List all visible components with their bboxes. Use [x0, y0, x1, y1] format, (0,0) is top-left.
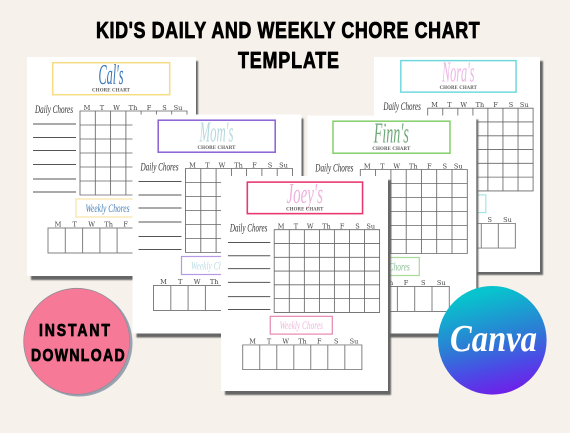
- daily grid: Su: [454, 162, 463, 170]
- daily grid: S: [268, 162, 273, 170]
- weekly chores label: [76, 199, 139, 217]
- title: [96, 18, 480, 74]
- chart sheet: Finn's: [307, 116, 478, 338]
- weekly row: W: [282, 337, 289, 345]
- badge: instant download: [24, 288, 132, 396]
- content: Nora's: [381, 58, 533, 248]
- daily grid: [428, 101, 533, 191]
- weekly chores label: Weekly Chores: [86, 201, 130, 215]
- daily grid: Th: [234, 162, 244, 170]
- daily grid: Th: [129, 104, 138, 112]
- header: Finn's: CHORE CHART: [372, 147, 411, 152]
- header: Cal's: CHORE CHART: [92, 88, 131, 94]
- weekly row: M: [403, 216, 410, 224]
- daily grid: T: [100, 104, 105, 112]
- weekly row: W: [88, 220, 95, 228]
- weekly chores label: [356, 258, 419, 276]
- header: Cal's: Cal's: [98, 59, 124, 91]
- weekly chores label: Weekly Chores: [191, 258, 235, 272]
- weekly row: S: [246, 278, 251, 286]
- title: TEMPLATE: [238, 48, 339, 74]
- weekly row: [396, 216, 515, 248]
- weekly row: Th: [385, 279, 394, 287]
- weekly row: W: [369, 279, 376, 287]
- weekly row: Th: [104, 220, 114, 228]
- weekly row: [328, 279, 449, 312]
- daily grid: M: [278, 223, 285, 231]
- daily grid: Su: [366, 223, 375, 231]
- weekly row: M: [335, 279, 342, 287]
- weekly row: Th: [298, 337, 307, 345]
- weekly row: M: [55, 220, 62, 228]
- daily grid: W: [393, 162, 400, 170]
- chart sheet: Joey's: [221, 176, 391, 395]
- chart sheet: Nora's: [374, 57, 543, 275]
- header: Cal's: [53, 59, 170, 95]
- chart sheet: Mom's: [132, 114, 304, 338]
- weekly row: [243, 337, 362, 370]
- badge: Canva logo: Canva: [450, 318, 537, 360]
- daily grid: T: [380, 162, 385, 170]
- daily grid: M: [364, 162, 371, 170]
- daily chores list: [228, 221, 270, 309]
- weekly row: F: [404, 279, 409, 287]
- daily chores list: Daily Chores: [140, 160, 179, 174]
- weekly row: F: [123, 220, 128, 228]
- weekly row: Su: [262, 278, 271, 286]
- daily grid: W: [113, 104, 120, 112]
- daily grid: [274, 223, 380, 312]
- weekly chores label: [182, 256, 244, 274]
- daily chores list: [33, 102, 76, 192]
- weekly row: Su: [350, 337, 358, 345]
- weekly row: M: [249, 337, 256, 345]
- daily chores list: [138, 160, 182, 250]
- header: Nora's: Nora's: [442, 58, 474, 89]
- weekly row: T: [178, 278, 183, 286]
- weekly row: Su: [437, 279, 446, 287]
- weekly row: [48, 220, 169, 253]
- daily grid: F: [252, 162, 257, 170]
- daily chores list: [381, 99, 424, 188]
- daily grid: T: [294, 223, 299, 231]
- daily chores list: Daily Chores: [315, 160, 353, 174]
- daily chores list: Daily Chores: [383, 99, 421, 113]
- weekly row: S: [141, 220, 146, 228]
- weekly row: F: [229, 278, 234, 286]
- header: Finn's: [333, 118, 450, 153]
- daily grid: S: [509, 101, 513, 109]
- weekly row: T: [353, 279, 358, 287]
- weekly chores label: Weekly Chores: [433, 197, 477, 211]
- badge: Canva logo: [438, 286, 547, 395]
- daily grid: Th: [476, 101, 484, 109]
- weekly row: S: [334, 337, 338, 345]
- daily grid: F: [147, 104, 152, 112]
- daily grid: S: [443, 162, 448, 170]
- daily grid: W: [307, 223, 314, 231]
- header: Nora's: CHORE CHART: [440, 86, 478, 91]
- weekly chores label: [270, 316, 332, 334]
- weekly row: T: [267, 337, 272, 345]
- weekly row: M: [160, 278, 167, 286]
- daily chores list: [313, 160, 356, 250]
- daily grid: T: [205, 162, 210, 170]
- daily grid: Su: [279, 162, 288, 170]
- daily grid: F: [340, 223, 345, 231]
- badge: instant download: DOWNLOAD: [31, 345, 125, 365]
- badge: instant download: INSTANT: [39, 320, 110, 340]
- daily grid: S: [162, 104, 167, 112]
- daily grid: M: [84, 104, 91, 112]
- weekly row: T: [72, 220, 77, 228]
- weekly chores label: Weekly Chores: [280, 318, 323, 332]
- daily grid: T: [447, 101, 452, 109]
- daily grid: F: [493, 101, 498, 109]
- header: Mom's: Mom's: [199, 116, 234, 148]
- header: Joey's: [247, 179, 363, 214]
- daily grid: Th: [322, 223, 331, 231]
- daily grid: M: [189, 162, 196, 170]
- header: Joey's: CHORE CHART: [286, 207, 324, 212]
- weekly row: T: [420, 216, 425, 224]
- daily grid: Th: [409, 162, 418, 170]
- weekly row: W: [436, 216, 443, 224]
- header: Mom's: [158, 116, 275, 152]
- daily grid: S: [355, 223, 360, 231]
- weekly row: Th: [210, 278, 219, 286]
- weekly chores label: [424, 195, 486, 213]
- weekly row: F: [317, 337, 322, 345]
- daily chores list: Daily Chores: [229, 221, 268, 235]
- daily grid: [186, 162, 292, 252]
- header: Mom's: CHORE CHART: [198, 146, 236, 151]
- daily grid: F: [427, 162, 432, 170]
- daily grid: W: [460, 101, 467, 109]
- weekly row: Su: [157, 220, 165, 228]
- weekly row: Th: [452, 216, 460, 224]
- daily grid: [80, 104, 187, 195]
- content: Joey's: [228, 179, 380, 370]
- weekly row: [154, 278, 274, 310]
- weekly row: W: [194, 278, 201, 286]
- daily grid: M: [431, 101, 438, 109]
- daily grid: [360, 162, 467, 254]
- title: KID'S DAILY AND WEEKLY CHORE CHART: [96, 18, 480, 44]
- header: Nora's: [401, 58, 516, 92]
- daily grid: Su: [174, 104, 182, 112]
- chart sheet: Cal's: [27, 57, 198, 280]
- weekly chores label: Weekly Chores: [366, 260, 410, 274]
- weekly row: S: [421, 279, 426, 287]
- daily grid: Su: [520, 101, 529, 109]
- weekly row: F: [470, 216, 475, 224]
- daily grid: W: [219, 162, 226, 170]
- daily chores list: Daily Chores: [34, 102, 73, 116]
- weekly row: Su: [503, 216, 512, 224]
- weekly row: S: [488, 216, 492, 224]
- header: Joey's: Joey's: [287, 179, 323, 210]
- header: Finn's: Finn's: [373, 118, 409, 150]
